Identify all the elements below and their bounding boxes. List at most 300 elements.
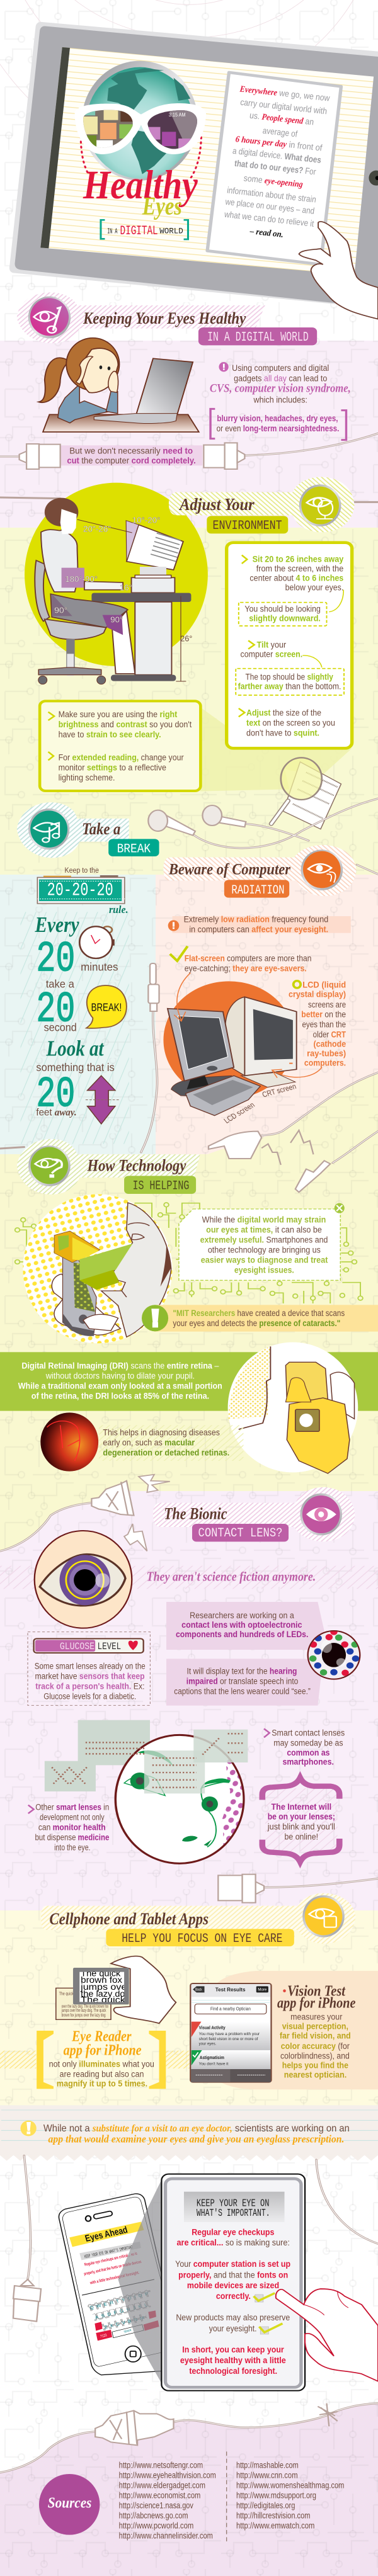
icon: alert xyxy=(219,362,229,372)
header plate xyxy=(17,802,129,858)
glucose level meter xyxy=(34,1638,144,1653)
arrow: to CRT xyxy=(272,1067,322,1078)
text: other smart lenses: Other smart lenses in xyxy=(35,1803,109,1812)
subheading pill xyxy=(108,839,159,856)
callout: internet on your lenses: be online! xyxy=(285,1832,318,1842)
tablet body xyxy=(9,22,378,319)
subheading pill xyxy=(198,327,317,345)
callout: display text: impaired or translate speech into xyxy=(186,1676,298,1686)
intro card: that do to our eyes? For xyxy=(234,159,316,177)
text: vision test app xyxy=(277,1982,355,2080)
retina scan machine illustration xyxy=(228,1342,358,1473)
panel: screen distance tips: The top should be slightly xyxy=(246,672,333,682)
intro card: information about the strain xyxy=(226,185,317,205)
icon: eye radiation xyxy=(301,849,343,890)
text: flat screen xyxy=(185,954,311,973)
smartphone illustration: Eyes Ahead xyxy=(84,2225,129,2244)
ergonomic workstation illustration: 90° xyxy=(110,615,123,625)
text: other smart lenses: into the eye. xyxy=(54,1843,90,1853)
text: helps in diagnosing: This helps in diagnosing diseases xyxy=(103,1427,220,1438)
panel: screen distance tips: below your eyes. xyxy=(285,582,343,593)
source list left: http://www.eldergadget.com xyxy=(119,2480,205,2490)
tablet message panel: your eyesight. xyxy=(209,2324,257,2334)
callout: cvs text: or even long-term nearsightedness. xyxy=(217,424,339,434)
callout: researchers: contact lens with optoelectronic xyxy=(181,1620,302,1630)
title: Healthy Eyes: Healthy xyxy=(83,162,198,208)
intro card: 6 hours per day in front of xyxy=(235,134,323,153)
green circle backdrop xyxy=(25,483,208,666)
usb cable banner xyxy=(0,433,378,469)
lcd header: keep your eye: WHAT'S IMPORTANT. xyxy=(197,2208,270,2220)
subheading pill: CONTACT LENS? xyxy=(198,1526,282,1541)
source list right xyxy=(236,2460,344,2531)
text: LCD explanation: LCD (liquid xyxy=(302,980,346,990)
text: feet away: feet away. xyxy=(36,1107,77,1118)
vision test phone screen: You may have a problem with your xyxy=(199,2031,260,2036)
text: look at: Look at xyxy=(46,1037,105,1061)
callout: researchers: Researchers are working on a xyxy=(190,1611,294,1621)
background curve: sources section xyxy=(0,2403,378,2576)
panel: screen distance tips: farther away than the bottom. xyxy=(238,681,341,691)
icon: eye question xyxy=(28,1145,71,1186)
source list left: http://www.netsoftengr.com xyxy=(119,2460,203,2470)
intro card xyxy=(207,72,341,264)
callout: internet on your lenses: be on your lenses; xyxy=(268,1812,335,1822)
heading: beware of computer: Beware of Computer xyxy=(168,860,290,878)
header plate xyxy=(163,845,357,896)
panel: eye doctor note band xyxy=(0,2105,378,2161)
panel: brightness tips: Make sure you are using the right xyxy=(59,710,177,720)
subheading pill xyxy=(106,1929,294,1946)
heading: adjust your: Adjust Your xyxy=(178,496,255,514)
callout: low radiation: in computers can affect your eyesight. xyxy=(189,924,328,934)
white sunglasses xyxy=(75,103,206,154)
text: LCD explanation: older CRT xyxy=(313,1030,346,1040)
banner: digital retinal imaging: of the retina, the DRI looks at 85% of the retina. xyxy=(32,1392,209,1401)
text: as common as smartphones xyxy=(264,1728,345,1767)
text: LCD explanation: crystal display) xyxy=(289,989,346,999)
callout: cvs text: Using computers and digital xyxy=(232,363,329,373)
red dotted loop xyxy=(81,132,202,178)
eye reader text frame: Eye Reader xyxy=(71,2028,132,2045)
eye reader phone in hand: The quick xyxy=(59,1991,74,1996)
text: minutes: minutes xyxy=(81,961,118,973)
intro card: a digital device. What does xyxy=(232,146,322,166)
text: substitute note xyxy=(43,2123,350,2145)
panel: sources xyxy=(0,2403,378,2544)
panel: brightness tips: have to strain to see clearly. xyxy=(59,730,161,740)
subheading pill xyxy=(192,1524,289,1541)
icon: green check mark xyxy=(170,946,188,961)
banner: digital retinal imaging xyxy=(0,1352,378,1411)
cable with plug xyxy=(0,2403,378,2473)
decorative radial arcs xyxy=(0,0,378,168)
smartphone illustration: properly, and that the fonts on mobile devices xyxy=(83,2259,142,2276)
subheading pill: RADIATION xyxy=(231,883,285,898)
smartphone illustration: QWERTYUIOP xyxy=(89,2291,149,2311)
vision test phone screen: You don't have it xyxy=(199,2062,228,2066)
glucose level meter: LEVEL xyxy=(98,1641,121,1652)
ergonomic workstation illustration: 10°-20° xyxy=(132,516,160,525)
panel: glucose sensor: track of a person's health. Ex: xyxy=(35,1682,145,1691)
text: helps in diagnosing: degeneration or detached retinas. xyxy=(103,1448,229,1458)
subheading pill: IN A DIGITAL WORLD xyxy=(207,329,309,345)
text: LCD explanation: screens are xyxy=(308,1000,346,1010)
callout: researchers: components and hundreds of LEDs. xyxy=(176,1630,308,1640)
source list right: http://www.mdsupport.org xyxy=(236,2490,316,2500)
arrow: up and down xyxy=(86,1075,119,1124)
subtitle: in a digital world xyxy=(101,220,188,239)
face with augmented display xyxy=(52,1730,248,1868)
source list right: http://www.emwatch.com xyxy=(236,2521,314,2531)
speech bubble: break xyxy=(86,985,127,1028)
eye reader phone in hand: The quick xyxy=(81,1968,121,1978)
text: other smart lenses xyxy=(28,1803,109,1853)
text: LCD explanation: (cathode xyxy=(313,1040,346,1049)
source list left: http://abcnews.go.com xyxy=(119,2511,188,2521)
ergonomic workstation illustration: 16° xyxy=(120,583,132,593)
text: vision test app: colorblindness), and xyxy=(280,2051,350,2061)
text: substitute note: While not a substitute for a visit to an eye doctor, scientists are working on an xyxy=(43,2123,350,2134)
panel: brightness tips: For extended reading, change your xyxy=(59,753,184,763)
retina photo xyxy=(40,1412,98,1472)
text: as common as smartphones: may someday be as xyxy=(273,1739,343,1748)
callout: display text xyxy=(166,1659,323,1706)
green circuit decoration xyxy=(15,1203,363,1303)
panel: screen distance tips: computer screen. xyxy=(241,650,302,659)
smartphone illustration xyxy=(59,2194,183,2375)
panel: brightness tips: brightness and contrast so you don't xyxy=(59,720,192,730)
arrow: to LCD xyxy=(174,973,190,1021)
source list left: http://www.pcworld.com xyxy=(119,2521,193,2531)
panel: glucose sensor xyxy=(28,1632,150,1705)
callout: low radiation: Extremely low radiation frequency found xyxy=(184,914,328,924)
woman at laptop illustration xyxy=(38,338,199,432)
text: helps in diagnosing xyxy=(99,1425,243,1461)
vision test phone screen xyxy=(190,1983,271,2082)
text: vision test app: measures your xyxy=(290,2012,342,2022)
heading: the bionic: The Bionic xyxy=(164,1504,227,1523)
source list left: http://science1.nasa.gov xyxy=(119,2500,193,2511)
big number 20 minutes: 20 xyxy=(36,936,75,984)
usb cable banner: cut the computer cord completely. xyxy=(67,456,196,466)
globe xyxy=(82,61,198,181)
panel: adjust your environment xyxy=(25,477,378,848)
panel: keep your eye on what's important xyxy=(13,2155,378,2391)
audio jack xyxy=(295,1160,330,1192)
smartphone illustration: Regular eye checkups are critical... so is xyxy=(84,2251,138,2267)
text: LCD explanation: ray-tubes) xyxy=(307,1048,346,1058)
source list right: http://mashable.com xyxy=(236,2460,299,2470)
source list left: http://www.eyehealthvision.com xyxy=(119,2470,216,2480)
callout: cvs text xyxy=(210,362,351,440)
panel: take a break xyxy=(17,802,159,858)
vision test phone screen: More xyxy=(258,1988,267,1992)
callout: digital world useful: extremely useful. Smartphones and xyxy=(200,1235,328,1245)
subheading pill xyxy=(207,516,288,533)
panel: screen distance tips: You should be looking xyxy=(244,604,321,614)
header plate xyxy=(41,1893,355,1944)
banner: digital retinal imaging: Digital Retinal Imaging (DRI) scans the entire retina – xyxy=(21,1361,219,1371)
eye reader phone in hand xyxy=(56,1956,176,2023)
cable across section xyxy=(0,497,378,502)
eye reader phone in hand: brown fox xyxy=(81,1975,122,1985)
intro card: Everywhere we go, we now xyxy=(239,84,331,103)
big number 20 feet: 20 xyxy=(36,1071,75,1120)
panel: brightness tips xyxy=(40,701,200,791)
vision test phone screen: Visual Activity xyxy=(199,2025,226,2031)
panel: screen distance tips: Adjust the size of the xyxy=(246,708,321,718)
LED contact lens xyxy=(308,1629,360,1679)
tablet message panel: New products may also preserve xyxy=(176,2313,290,2323)
heading: keeping your eyes healthy: Keeping Your Eyes Healthy xyxy=(83,309,246,328)
callout: internet on your lenses: The Internet will xyxy=(271,1802,331,1812)
eye reader phone in hand: the lazy dog xyxy=(81,1989,130,1999)
smartphone illustration: ZXCVBNM xyxy=(103,2315,145,2330)
callout: MIT researchers xyxy=(142,1305,378,1332)
panel: smart lens future xyxy=(28,1720,378,1903)
text: vision test app: helps you find the xyxy=(282,2061,348,2070)
panel: glucose sensor: Glucose levels for a diabetic. xyxy=(43,1692,136,1701)
text: vision test app: visual perception, xyxy=(282,2022,348,2031)
icon: eye and tree xyxy=(299,484,341,526)
smartphone illustration: ASDFGHJKL xyxy=(94,2302,148,2320)
intro card: what we can do to relieve it xyxy=(223,210,315,229)
eye reader phone in hand: jumps over the lazy dog. The quick xyxy=(61,2007,106,2013)
text: take a: take a xyxy=(46,978,74,990)
text: vision test app: nearest optician. xyxy=(284,2070,346,2080)
CRT and LCD monitors illustration xyxy=(168,997,297,1116)
hand holding tablet xyxy=(299,222,378,319)
panel: screen distance tips: text on the screen so you xyxy=(246,718,335,728)
bionic eye illustration xyxy=(35,1531,132,1628)
icon: stopwatch xyxy=(79,926,115,958)
callout: digital world useful: other technology are bringing us xyxy=(208,1245,321,1255)
heading: cellphone and tablet apps: Cellphone and Tablet Apps xyxy=(49,1910,209,1928)
subheading pill xyxy=(124,1176,196,1194)
title: Healthy Eyes xyxy=(83,162,198,220)
data overlay rectangles behind xyxy=(45,1720,150,1791)
eye reader phone in hand: brown fox jumps over the lazy dog xyxy=(62,2012,106,2017)
text: as common as smartphones: smartphones. xyxy=(282,1757,334,1767)
text: other smart lenses: can monitor health xyxy=(38,1823,106,1832)
panel: brightness tips: lighting scheme. xyxy=(59,773,115,783)
callout: display text: captions that the lens wearer could “see.” xyxy=(174,1686,311,1696)
label: CRT screen: CRT screen xyxy=(261,1082,297,1099)
tablet message panel: correctly. xyxy=(216,2291,251,2301)
subheading pill: HELP YOU FOCUS ON EYE CARE xyxy=(122,1932,282,1946)
digital clock rule display xyxy=(37,875,125,904)
eye reader text frame xyxy=(37,2028,166,2089)
text: every: Every xyxy=(35,913,79,937)
ergonomic workstation illustration xyxy=(35,498,192,684)
tablet screen xyxy=(40,47,374,275)
subheading pill: BREAK xyxy=(117,841,151,856)
icon: close button xyxy=(335,1203,345,1213)
vision test phone screen: Astigmatisim xyxy=(200,2055,224,2060)
section header plate xyxy=(17,292,265,343)
panel: screen distance tips: slightly downward. xyxy=(249,614,321,623)
tablet message panel: mobile devices are sized xyxy=(187,2281,279,2291)
source list right: http://edigitales.org xyxy=(236,2500,295,2511)
text: as common as smartphones: Smart contact lenses xyxy=(272,1728,345,1738)
tablet message panel: Regular eye checkups xyxy=(192,2227,274,2237)
retinal scan illustration xyxy=(23,1194,173,1343)
smartphone illustration: KEEP YOUR EYE ON WHAT'S IMPORTANT xyxy=(84,2245,134,2260)
vision test phone screen: short field vision in one or more of xyxy=(199,2036,258,2041)
lcd header: keep your eye xyxy=(184,2192,285,2222)
heading: take a: Take a xyxy=(82,820,120,838)
headphone jack cable xyxy=(141,963,159,1152)
title: Healthy Eyes: Eyes xyxy=(142,193,182,220)
text: vision test app: color accuracy (for xyxy=(281,2041,350,2051)
tablet message panel: are critical... so is making sure: xyxy=(176,2238,290,2248)
hatch band xyxy=(0,1566,378,1589)
eye reader phone in hand: The quick xyxy=(81,1995,125,2005)
sources badge xyxy=(39,2474,100,2535)
orange circle backdrop xyxy=(163,981,295,1099)
callout: low radiation xyxy=(168,914,351,934)
usb cable xyxy=(218,1875,378,1903)
intro card: – read on. xyxy=(249,227,284,240)
text: LCD explanation xyxy=(289,980,346,1068)
callout: researchers xyxy=(166,1602,324,1650)
callout: digital world useful: our eyes at times, it can also be xyxy=(206,1225,322,1235)
panel: screen distance tips: don't have to squint. xyxy=(246,729,319,738)
earbud cables xyxy=(148,798,378,848)
icon: eye xyxy=(300,1494,342,1535)
white sunglasses: 3:15 AM xyxy=(169,112,186,118)
ergonomic workstation illustration: 180°-90° xyxy=(65,575,98,584)
panel: screen distance tips: center about 4 to 6 inches xyxy=(249,573,343,583)
text: vision test app: Vision Test xyxy=(287,1982,346,1999)
intro card: some eye-opening xyxy=(243,173,304,190)
text: LCD explanation: better on the xyxy=(301,1010,346,1019)
source list right: http://www.cnn.com xyxy=(236,2470,298,2480)
usb cable banner: But we don't necessarily need to xyxy=(69,446,193,456)
subtitle: in a digital world: DIGITAL xyxy=(120,224,158,238)
text: they aren't science fiction: They aren't science fiction anymore. xyxy=(147,1569,316,1584)
source list left: http://www.channelinsider.com xyxy=(119,2531,213,2541)
callout: digital world useful xyxy=(179,1203,345,1280)
background curve: technology meets radiation xyxy=(207,842,378,1154)
callout: internet on your lenses: just blink and you'll xyxy=(267,1822,335,1832)
panel: brightness tips: monitor settings to a reflective xyxy=(59,763,166,773)
text: LCD explanation: eyes than the xyxy=(302,1020,346,1030)
cable with usb xyxy=(13,2155,378,2322)
icon: eye and music xyxy=(28,809,69,849)
panel: keeping your eyes healthy xyxy=(0,292,378,502)
text: flat screen: eye-catching; they are eye-savers. xyxy=(185,964,307,973)
hand pointing at tablet xyxy=(276,2289,378,2381)
background curve: bionic section xyxy=(0,1442,378,1551)
smartphone illustration: space xyxy=(123,2329,132,2334)
panel: tablet intro xyxy=(0,0,378,319)
subtitle: in a digital world: IN A xyxy=(107,227,117,235)
eye reader text frame: app for iPhone xyxy=(64,2041,142,2058)
plug cable with lightning xyxy=(0,1475,170,1551)
tablet message panel: eyesight healthy with a little xyxy=(180,2356,286,2366)
big number 20 second: 20 xyxy=(36,986,75,1035)
header plate xyxy=(169,477,354,532)
callout: display text: It will display text for the hearing xyxy=(187,1666,297,1676)
lcd header: keep your eye: KEEP YOUR EYE ON xyxy=(197,2198,269,2210)
intro card: average of xyxy=(262,126,299,139)
callout: MIT researchers: your eyes and detects the presence of cataracts." xyxy=(173,1319,340,1329)
text: other smart lenses: development not only xyxy=(40,1813,105,1822)
callout: digital world useful: While the digital world may strain xyxy=(202,1215,326,1225)
subheading pill: IS HELPING xyxy=(132,1178,189,1193)
ergonomic workstation illustration: 90° xyxy=(54,606,67,615)
shadow beam from phone to tablet xyxy=(118,2181,161,2383)
text: other smart lenses: but dispense medicine xyxy=(35,1833,109,1842)
callout: cvs text: gadgets all day can lead to xyxy=(234,374,327,383)
light cone from magnifier xyxy=(200,707,352,792)
digital clock rule display: 20-20-20 xyxy=(47,880,113,901)
cable end xyxy=(0,1147,24,1149)
subtitle: in a digital world: WORLD xyxy=(159,227,183,236)
text: as common as smartphones: common as xyxy=(287,1748,329,1758)
glucose level meter: GLUCOSE xyxy=(60,1641,94,1652)
callout: digital world useful: easier ways to diagnose and treat xyxy=(201,1256,328,1265)
panel: screen distance tips: Sit 20 to 26 inches away xyxy=(253,554,344,564)
icon: eye phone xyxy=(302,1895,345,1938)
speech bubble: break: BREAK! xyxy=(91,1001,122,1013)
panel: how technology is helping xyxy=(0,1139,378,1473)
icon: alert xyxy=(21,2121,37,2136)
text: helps in diagnosing: early on, such as macular xyxy=(103,1438,195,1448)
vision test phone screen: Back xyxy=(195,1988,202,1992)
text: LCD explanation: computers. xyxy=(304,1058,346,1068)
diagonal hatch backdrop xyxy=(21,912,129,1144)
vision test phone screen: your eyes. xyxy=(199,2041,216,2046)
tablet message panel xyxy=(161,2174,305,2391)
smartphone illustration: with a little technological foresight. xyxy=(89,2270,140,2286)
cable with plug and lightning xyxy=(209,865,378,1165)
panel: screen distance tips xyxy=(227,543,352,748)
callout: internet on your lenses xyxy=(262,1778,340,1862)
panel: glucose sensor: Some smart lenses already on the xyxy=(35,1662,146,1671)
callout: cvs text: which includes: xyxy=(253,395,307,405)
text: flat screen: Flat-screen computers are more than xyxy=(185,954,311,963)
header plate xyxy=(153,1487,355,1541)
icon: magnifier over document xyxy=(271,757,341,829)
sources badge: Sources xyxy=(48,2494,91,2511)
tablet message panel: In short, you can keep your xyxy=(182,2345,284,2355)
notebook lines xyxy=(1,2110,378,2140)
subheading pill: ENVIRONMENT xyxy=(212,518,282,533)
eye reader phone in hand: jumps over xyxy=(80,1982,130,1992)
torn paper band xyxy=(0,2105,378,2161)
smartphone illustration: .?123 xyxy=(99,2334,108,2339)
source list left: http://www.economist.com xyxy=(119,2490,200,2500)
eye reader text frame: not only illuminates what you xyxy=(49,2060,154,2069)
callout: digital world useful: eyesight issues. xyxy=(234,1266,294,1275)
panel: the bionic contact lens xyxy=(0,1475,378,1706)
intro card: us. People spend an xyxy=(249,111,314,127)
eye reader phone in hand: over the lazy dog. The quick brown fox xyxy=(62,2004,108,2009)
panel: beware of computer radiation xyxy=(163,845,378,1192)
tablet message panel: properly, and that the fonts on xyxy=(178,2270,288,2280)
text: something that is: something that is xyxy=(36,1061,115,1074)
divider xyxy=(226,2451,227,2544)
tablet message panel: Your computer station is set up xyxy=(175,2259,290,2269)
eye reader text frame: magnify it up to 5 times. xyxy=(57,2079,147,2089)
banner: digital retinal imaging: without doctors having to dilate your pupil. xyxy=(45,1371,195,1381)
intro card: we place on our eyes – and xyxy=(224,197,315,217)
subheading pill xyxy=(224,880,289,898)
hatch side bands xyxy=(0,2051,190,2068)
